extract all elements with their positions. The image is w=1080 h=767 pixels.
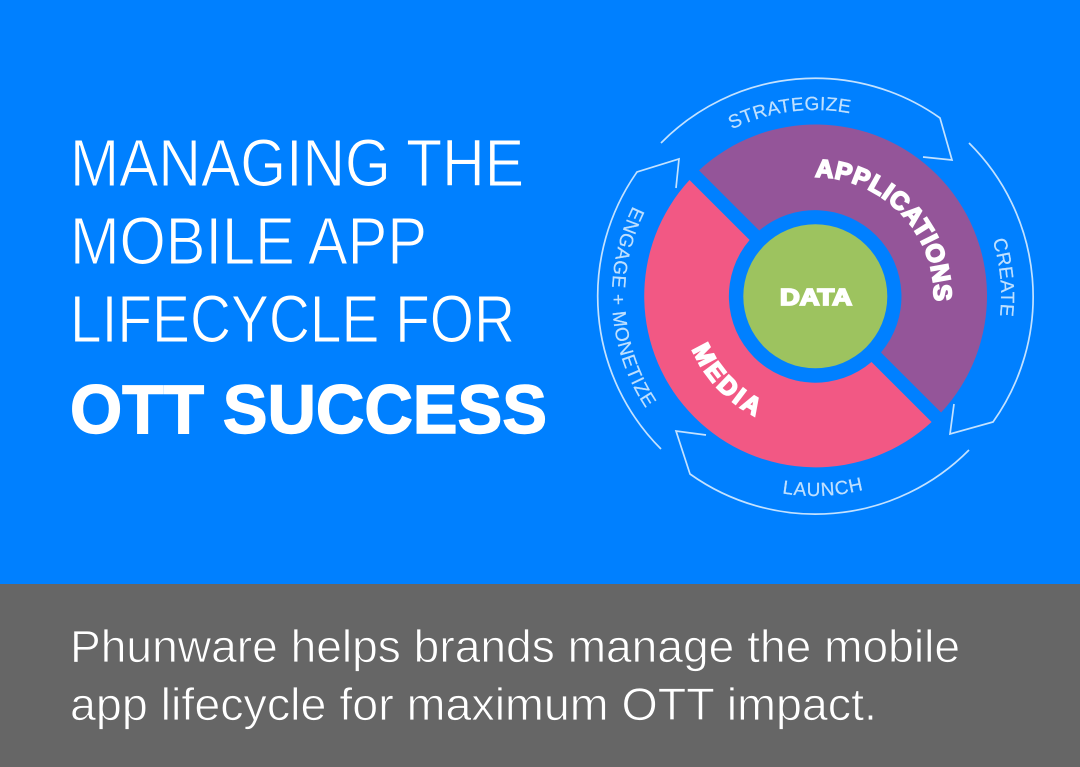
label: applications: APPLICATIONS <box>814 159 952 301</box>
segment: applications <box>699 124 987 413</box>
title <box>70 126 547 448</box>
label: data: DATA <box>780 284 852 310</box>
segment: media <box>644 180 932 467</box>
arrow: create <box>950 143 1033 434</box>
lifecycle diagram <box>596 77 1034 515</box>
label: strategize: STRATEGIZE <box>728 96 851 128</box>
circle: data <box>743 224 887 368</box>
label: media: MEDIA <box>691 341 759 418</box>
arrow: engage and monetize <box>598 159 679 449</box>
title: MOBILE APP <box>70 204 427 279</box>
title: LIFECYCLE FOR <box>70 282 515 357</box>
title: MANAGING THE <box>70 126 524 201</box>
footer text: Phunware helps brands manage the mobile <box>70 621 960 672</box>
footer text <box>70 621 960 730</box>
label: engage and monetize: ENGAGE + MONETIZE <box>612 207 656 408</box>
label: create: CREATE <box>994 238 1014 316</box>
label: launch: LAUNCH <box>784 477 862 496</box>
blue background panel <box>0 0 1080 584</box>
arrow: launch <box>676 431 969 514</box>
footer text: app lifecycle for maximum OTT impact. <box>70 679 877 730</box>
grey footer band <box>0 584 1080 767</box>
arrow: strategize <box>661 78 952 160</box>
title: OTT SUCCESS <box>70 371 547 448</box>
